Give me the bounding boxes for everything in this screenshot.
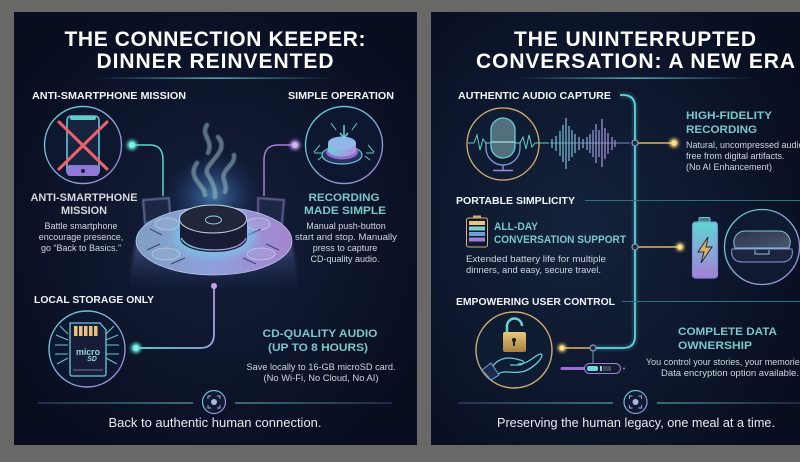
heading: local storage only: LOCAL STORAGE ONLY [34,294,154,306]
text block: all-day conversation support [466,221,626,275]
text block: anti-smartphone mission: encourage presence, [39,232,123,242]
arrow: node to high-fidelity recording [632,138,678,148]
title: the uninterrupted conversation [476,32,794,68]
text block: cd-quality audio: (No Wi-Fi, No Cloud, No AI) [264,373,378,383]
illustration: dinner table with recorder [128,125,300,292]
text block: all-day conversation support: dinners, and easy, secure travel. [466,265,601,275]
text block: cd-quality audio [246,328,396,383]
text block: cd-quality audio: (UP TO 8 HOURS) [268,342,368,354]
text block: recording made simple: RECORDING [308,192,380,204]
arrow: connector from storage to table [131,283,217,353]
icon: carrying case [724,210,800,284]
text block: anti-smartphone mission [30,192,138,253]
text block: complete data ownership: OWNERSHIP [678,340,752,352]
icon: microphone with waveform [467,108,630,180]
text block: recording made simple: MADE SIMPLE [304,205,386,217]
icon: microSD card: micro [76,347,100,358]
heading: portable simplicity: PORTABLE SIMPLICITY [456,195,575,207]
text block: high-fidelity recording [686,110,800,172]
title: the uninterrupted conversation: CONVERSATION: A NEW ERA [476,50,795,73]
text block: high-fidelity recording: (No AI Enhancement) [686,162,772,172]
title: the connection keeper [64,28,366,73]
footer: preserving the human legacy [458,390,800,430]
heading: authentic audio capture: AUTHENTIC AUDIO CAPTURE [458,90,611,102]
icon: padlock in open hand [476,312,552,388]
text block: all-day conversation support: CONVERSATION SUPPORT [494,234,626,246]
footer: back to authentic human connection [38,390,392,430]
text block: high-fidelity recording: RECORDING [686,124,757,136]
icon: large battery with bolt [692,218,718,278]
icon: microSD card: SD [87,356,97,363]
icon: microSD card [49,311,125,387]
text block: high-fidelity recording: free from digital artifacts. [686,151,785,161]
text block: recording made simple: Manual push-button [306,221,386,231]
icon: crossed-out smartphone [44,106,122,184]
panel: the uninterrupted conversation [431,12,800,445]
arrow: node to battery and case [632,243,684,251]
text block: complete data ownership: Data encryption option available. [661,368,799,378]
title: the uninterrupted conversation: THE UNINTERRUPTED [514,28,756,51]
footer: back to authentic human connection: Back to authentic human connection. [108,416,322,430]
text block: all-day conversation support: ALL-DAY [494,221,539,233]
icon: push button [306,106,382,184]
text block: high-fidelity recording: HIGH-FIDELITY [686,110,773,122]
text block: anti-smartphone mission: MISSION [61,205,107,217]
heading: simple operation: SIMPLE OPERATION [288,90,394,102]
text block: cd-quality audio: Save locally to 16-GB microSD card. [246,362,396,372]
footer: preserving the human legacy: Preserving the human legacy, one meal at a time. [497,416,775,430]
text block: recording made simple: CD-quality audio. [310,254,380,264]
icon: encryption slider [562,364,625,374]
title: the connection keeper: THE CONNECTION KEEPER: [64,28,366,51]
text block: anti-smartphone mission: ANTI-SMARTPHONE [30,192,138,204]
title: the connection keeper: DINNER REINVENTED [96,50,334,73]
heading: anti-smartphone mission: ANTI-SMARTPHONE MISSION [32,90,186,102]
arrow: main vertical timeline [593,95,635,348]
text block: complete data ownership: COMPLETE DATA [678,326,777,338]
heading: empowering user control: EMPOWERING USER CONTROL [456,296,616,308]
arrow: connector to button icon [264,140,300,196]
text block: all-day conversation support: Extended battery life for multiple [466,254,606,264]
text block: anti-smartphone mission: Battle smartphone [44,221,118,231]
text block: recording made simple: press to capture [313,243,377,253]
arrow: node to user control [558,344,596,363]
text block: recording made simple: start and stop. Manually [295,232,398,242]
text block: complete data ownership [646,326,800,378]
arrow: connector to phone icon [127,140,163,196]
text block: recording made simple [295,192,398,264]
text block: anti-smartphone mission: go “Back to Basics.” [41,243,121,253]
icon: small battery [466,216,488,247]
text block: cd-quality audio: CD-QUALITY AUDIO [262,328,378,340]
panel: the connection keeper [14,12,417,445]
